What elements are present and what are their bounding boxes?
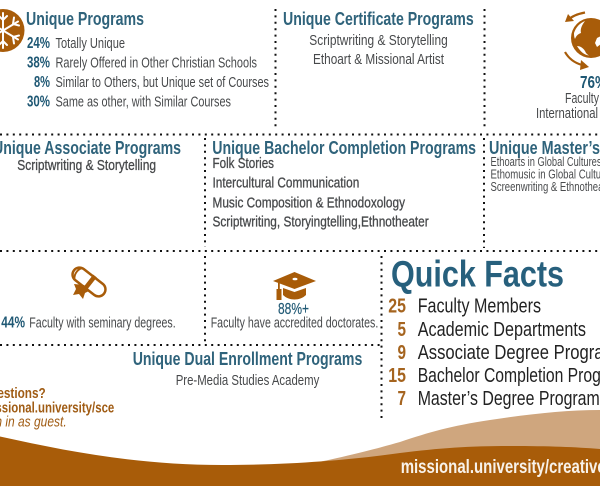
panel: masters programs	[489, 137, 600, 194]
panel: dual enrollment programs	[133, 348, 362, 389]
callout: questions	[0, 386, 114, 431]
fact: bachelor completion programs: 15	[388, 365, 406, 387]
heading: associate programs: Unique Associate Programs	[0, 137, 181, 158]
stat: seminary degrees	[1, 315, 176, 332]
icon: diploma scroll	[70, 265, 108, 299]
stat: accredited doctorates	[211, 301, 378, 331]
fact: associate degree programs: 9	[398, 342, 406, 364]
icon: snowflake	[0, 9, 24, 52]
stat: similar to others: Similar to Others, but Unique set of Courses	[56, 75, 269, 91]
stat: totally unique	[27, 35, 125, 52]
icon: globe with arrows	[565, 12, 600, 70]
panel: bachelor completion programs	[212, 137, 476, 230]
fact: faculty members	[388, 296, 541, 318]
fact: masters degree programs: 7	[398, 388, 406, 410]
stat: rarely offered: 38%	[27, 54, 50, 72]
panel: unique programs	[26, 8, 269, 110]
heading: unique programs: Unique Programs	[26, 8, 144, 29]
stat: same as other: Same as other, with Similar Courses	[56, 94, 231, 110]
bachelor list: Scriptwriting, Storyingtelling,Ethnotheater	[212, 214, 429, 230]
masters list	[490, 155, 600, 194]
stat: same as other	[27, 94, 231, 110]
stat: accredited doctorates: Faculty have accredited doctorates.	[211, 315, 378, 331]
background wave: brown	[0, 436, 600, 486]
bachelor list: Intercultural Communication	[212, 176, 359, 192]
panel: quick facts	[388, 254, 600, 410]
stat: rarely offered: Rarely Offered in Other Christian Schools	[56, 56, 257, 72]
certificate list: Scriptwriting & Storytelling	[309, 33, 448, 49]
fact: faculty members: 25	[388, 296, 406, 318]
stat: accredited doctorates: 88%+	[278, 301, 309, 318]
stat: totally unique: 24%	[27, 35, 50, 52]
panel: associate programs	[0, 137, 181, 174]
stat: seminary degrees: 44%	[1, 315, 25, 332]
heading: bachelor completion programs: Unique Bachelor Completion Programs	[212, 137, 476, 158]
stat: rarely offered	[27, 54, 257, 72]
stat: international faculty	[536, 72, 600, 122]
stat: seminary degrees: Faculty with seminary degrees.	[29, 316, 176, 332]
bachelor list: Folk Stories	[212, 156, 274, 172]
stat: totally unique: Totally Unique	[56, 36, 125, 52]
heading: quick facts: Quick Facts	[391, 254, 564, 295]
certificate list: Ethoart & Missional Artist	[313, 52, 444, 68]
stat: same as other: 30%	[27, 94, 50, 110]
stat: similar to others: 8%	[34, 74, 50, 91]
associate list: Scriptwriting & Storytelling	[17, 158, 156, 174]
background wave: tan	[290, 410, 600, 470]
bachelor list: Music Composition & Ethnodoxology	[212, 195, 406, 211]
dual enrollment item: Pre-Media Studies Academy	[176, 373, 320, 389]
stat: similar to others	[34, 74, 269, 91]
icon: graduation cap	[273, 272, 316, 300]
bachelor list	[212, 156, 429, 230]
white cap button	[292, 278, 298, 280]
certificate list	[309, 33, 448, 68]
panel: certificate programs	[283, 8, 474, 68]
heading: certificate programs: Unique Certificate Programs	[283, 8, 474, 29]
heading: dual enrollment: Unique Dual Enrollment Programs	[133, 348, 362, 369]
fact: academic departments: 5	[398, 319, 406, 341]
fact: faculty members: Faculty Members	[418, 296, 541, 318]
